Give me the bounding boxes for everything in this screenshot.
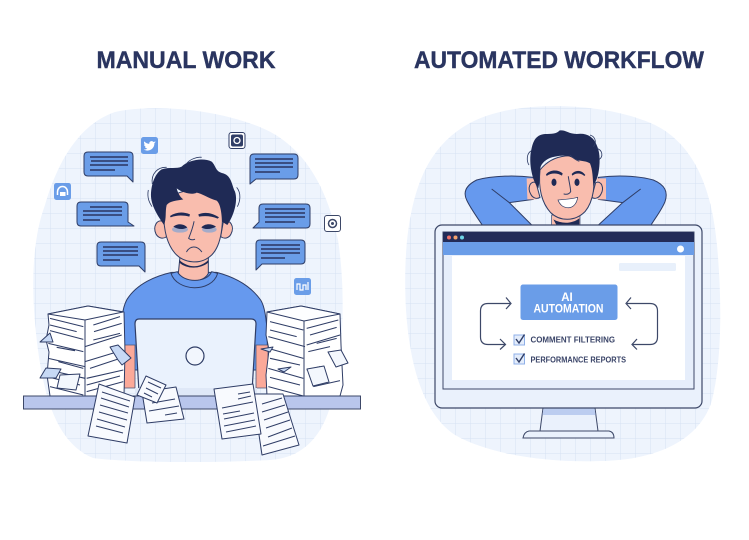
loose notes right stack bbox=[261, 347, 348, 386]
hair bbox=[151, 160, 236, 225]
sheet front right bbox=[214, 384, 261, 439]
background blob: manual bbox=[33, 108, 343, 462]
sheet front left bbox=[88, 384, 135, 443]
bubble 5 bbox=[253, 204, 310, 228]
ears and hands bbox=[527, 178, 606, 199]
person: tired worker bbox=[122, 157, 267, 370]
monitor frame bbox=[435, 225, 702, 408]
speech bubbles: left and right of the head bbox=[77, 152, 310, 272]
collar bbox=[171, 272, 218, 288]
icon: instagram right bbox=[324, 216, 340, 232]
window header bbox=[443, 242, 694, 255]
paper stack left bbox=[40, 306, 131, 396]
shirt bbox=[122, 272, 267, 370]
search bar bbox=[619, 263, 676, 271]
arm left bbox=[465, 176, 533, 227]
bubble 6 bbox=[256, 240, 305, 270]
hair strands bbox=[148, 157, 240, 207]
neck shadow bbox=[179, 260, 208, 268]
background blob: automated bbox=[405, 106, 720, 461]
neck bbox=[178, 257, 208, 281]
title: automated workflow: AUTOMATED WORKFLOW bbox=[414, 47, 704, 74]
person: relaxed worker bbox=[465, 130, 666, 228]
eyes and brows bbox=[170, 213, 219, 233]
arrows: left loop bbox=[480, 298, 511, 350]
scattered papers on the desk bbox=[88, 376, 299, 455]
paper stack right bbox=[261, 306, 348, 396]
laptop bbox=[135, 319, 257, 396]
nose and smile bbox=[564, 177, 571, 194]
icon: instagram top bbox=[229, 132, 245, 148]
arm folds bbox=[492, 189, 641, 203]
bubble 1 bbox=[84, 152, 133, 182]
bubble 3 bbox=[97, 242, 145, 272]
sheet far right bbox=[253, 394, 299, 455]
arrows: right loop bbox=[626, 298, 658, 350]
arms bbox=[122, 345, 268, 388]
hair bbox=[530, 130, 600, 188]
icon: twitter bird bbox=[141, 137, 158, 154]
checklist item: comment filtering: COMMENT FILTERING bbox=[530, 335, 615, 345]
panel: automated workflow illustration bbox=[405, 106, 720, 461]
arm right bbox=[597, 176, 666, 227]
face bbox=[164, 190, 222, 262]
eyes and brows bbox=[546, 170, 585, 186]
monitor stand bbox=[540, 408, 598, 431]
ears bbox=[155, 221, 232, 238]
bubble 2 bbox=[77, 202, 134, 226]
window title bar bbox=[443, 232, 694, 242]
checklist item: performance reports: PERFORMANCE REPORTS bbox=[530, 354, 626, 364]
screen bbox=[443, 232, 694, 389]
window content bbox=[452, 256, 685, 380]
nose and mouth bbox=[187, 222, 202, 252]
panel: manual work illustration bbox=[24, 108, 360, 462]
icon: app tile left bbox=[54, 183, 71, 200]
sheet back middle bbox=[142, 387, 184, 423]
neck bbox=[552, 215, 580, 228]
desk bbox=[24, 396, 360, 409]
bubble 4 bbox=[250, 154, 298, 184]
face bbox=[540, 156, 594, 219]
hair strands bbox=[527, 135, 602, 165]
loose notes left stack bbox=[40, 333, 131, 390]
title: manual work: MANUAL WORK bbox=[96, 47, 276, 74]
sheet small bbox=[137, 376, 166, 403]
monitor bbox=[435, 225, 702, 438]
window controls bbox=[447, 236, 464, 240]
AI automation box: AUTOMATION bbox=[534, 304, 604, 316]
AI automation box bbox=[520, 284, 618, 320]
monitor base bbox=[523, 431, 614, 438]
AI automation box: AI bbox=[561, 292, 573, 304]
icon: bar chart tile bbox=[294, 278, 311, 295]
